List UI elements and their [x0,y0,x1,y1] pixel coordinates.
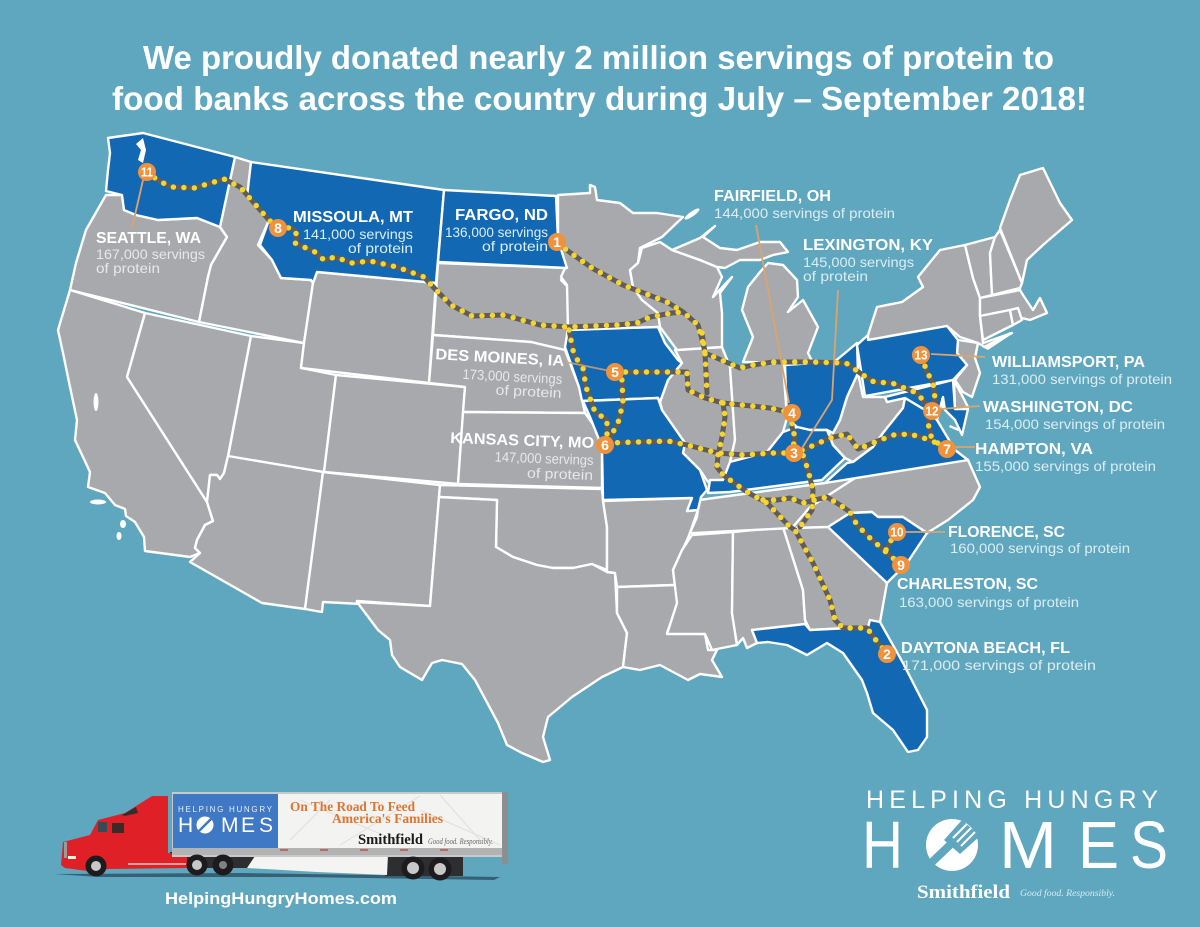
label: Missoula: 141,000 servings [303,226,413,242]
label: Kansas City: 147,000 servings [494,449,594,468]
highlighted states [106,133,968,752]
gray states [58,157,1072,762]
Helping Hungry Homes logo: M [999,808,1057,883]
label: Fairfield: 144,000 servings of protein [714,205,895,221]
label: Kansas City: KANSAS CITY, MO [450,430,594,452]
website url: HelpingHungryHomes.com [165,889,397,908]
label: Seattle: SEATTLE, WA [96,230,201,247]
marker 11 [138,163,156,181]
label: Fairfield [714,188,895,221]
marker 6 [596,436,614,454]
label: Kansas City [449,430,594,483]
label: Seattle [96,230,205,276]
label: Hampton: 155,000 servings of protein [975,458,1156,474]
label: Williamsport: WILLIAMSPORT, PA [992,354,1145,371]
trailer: Smithfield [358,832,424,848]
label: Missoula: of protein [348,240,413,256]
trailer [172,792,508,864]
marker 1 [548,233,566,251]
marker 13: 13 [914,348,928,362]
marker 7: 7 [943,441,951,457]
label: Daytona Beach [901,640,1096,673]
cab [61,796,187,872]
trailer: HELPING HUNGRY [178,805,273,814]
label: Fargo [445,207,548,254]
Helping Hungry Homes logo: Good food. Responsibly. [1020,888,1115,898]
route line dots [146,172,947,653]
label: Lexington [803,237,934,284]
trailer: America's Families [332,812,444,827]
map of the United States [58,133,1072,762]
Helping Hungry Homes logo: HELPING HUNGRY [866,786,1158,814]
title: We proudly donated nearly 2 million servings of protein to [143,39,1054,76]
marker 9: 9 [897,557,905,573]
marker 4 [783,404,801,422]
Helping Hungry Homes logo: Smithfield [917,882,1010,903]
label: Florence: FLORENCE, SC [948,524,1065,541]
label: Washington [983,399,1165,432]
marker 13 [912,346,930,364]
label: Des Moines: of protein [495,382,562,401]
label: Seattle: 167,000 servings [96,246,205,262]
icon: plate and fork [926,819,980,871]
label: Missoula [293,209,414,256]
label: Lexington: LEXINGTON, KY [803,237,934,254]
label: Williamsport: 131,000 servings of protein [992,371,1172,387]
marker 12: 12 [926,404,939,418]
label: Des Moines: DES MOINES, IA [435,346,565,370]
marker 12 [923,402,941,420]
skirt [247,853,388,875]
label: Lexington: of protein [803,268,868,284]
trailer: HOMES [178,814,273,837]
marker 3: 3 [790,445,798,461]
label: Charleston: 163,000 servings of protein [899,594,1079,610]
title [112,39,1087,117]
label: Missoula: MISSOULA, MT [293,209,414,226]
wheels [86,855,451,880]
label: Des Moines: 173,000 servings [462,366,563,387]
label: Washington: WASHINGTON, DC [983,399,1133,416]
label: Seattle: of protein [96,260,160,276]
trailer: On The Road To Feed [290,800,415,815]
label: Des Moines [433,346,565,401]
title: food banks across the country during July – September 2018! [112,80,1087,117]
label: Lexington: 145,000 servings [803,254,914,270]
marker 1: 1 [553,234,561,250]
numbered stop markers [138,163,956,663]
marker 3 [785,444,803,462]
marker 2 [878,645,896,663]
label: Fairfield: FAIRFIELD, OH [714,188,831,205]
Helping Hungry Homes logo: H [862,808,903,883]
label: Florence [948,524,1130,556]
marker 10: 10 [890,526,904,540]
chassis [170,852,260,868]
ground shadow [54,873,500,880]
leader lines [132,180,985,532]
label: Hampton [975,441,1156,474]
Helping Hungry Homes logo: E [1078,808,1119,883]
route line base [146,172,947,653]
label: Williamsport [992,354,1172,387]
marker 5: 5 [611,364,619,380]
marker 11: 11 [141,166,153,180]
marker 9 [892,556,910,574]
marker 8: 8 [274,220,282,236]
label: Washington: 154,000 servings of protein [985,416,1165,432]
marker 7 [938,440,956,458]
label: Charleston: CHARLESTON, SC [897,576,1038,593]
label: Fargo: of protein [482,238,548,254]
label: Kansas City: of protein [527,465,593,483]
truck route lines [146,172,947,653]
Helping Hungry Homes logo [862,786,1168,903]
islands and coastal details [90,138,1012,540]
marker 5 [606,363,624,381]
marker 4: 4 [788,405,796,421]
Helping Hungry Homes logo: S [1130,808,1168,883]
label: Florence: 160,000 servings of protein [950,540,1130,556]
label: Fargo: FARGO, ND [455,207,548,224]
label: Charleston [897,576,1079,610]
marker 6: 6 [601,437,609,453]
marker 8 [269,219,287,237]
label: Daytona Beach: 171,000 servings of protein [902,657,1096,673]
label: Hampton: HAMPTON, VA [975,441,1093,458]
marker 2: 2 [883,646,891,662]
trailer: Good food. Responsibly. [428,837,493,846]
truck illustration [54,792,508,880]
marker 10 [888,523,906,541]
label: Fargo: 136,000 servings [445,224,548,240]
label: Daytona Beach: DAYTONA BEACH, FL [901,640,1070,657]
